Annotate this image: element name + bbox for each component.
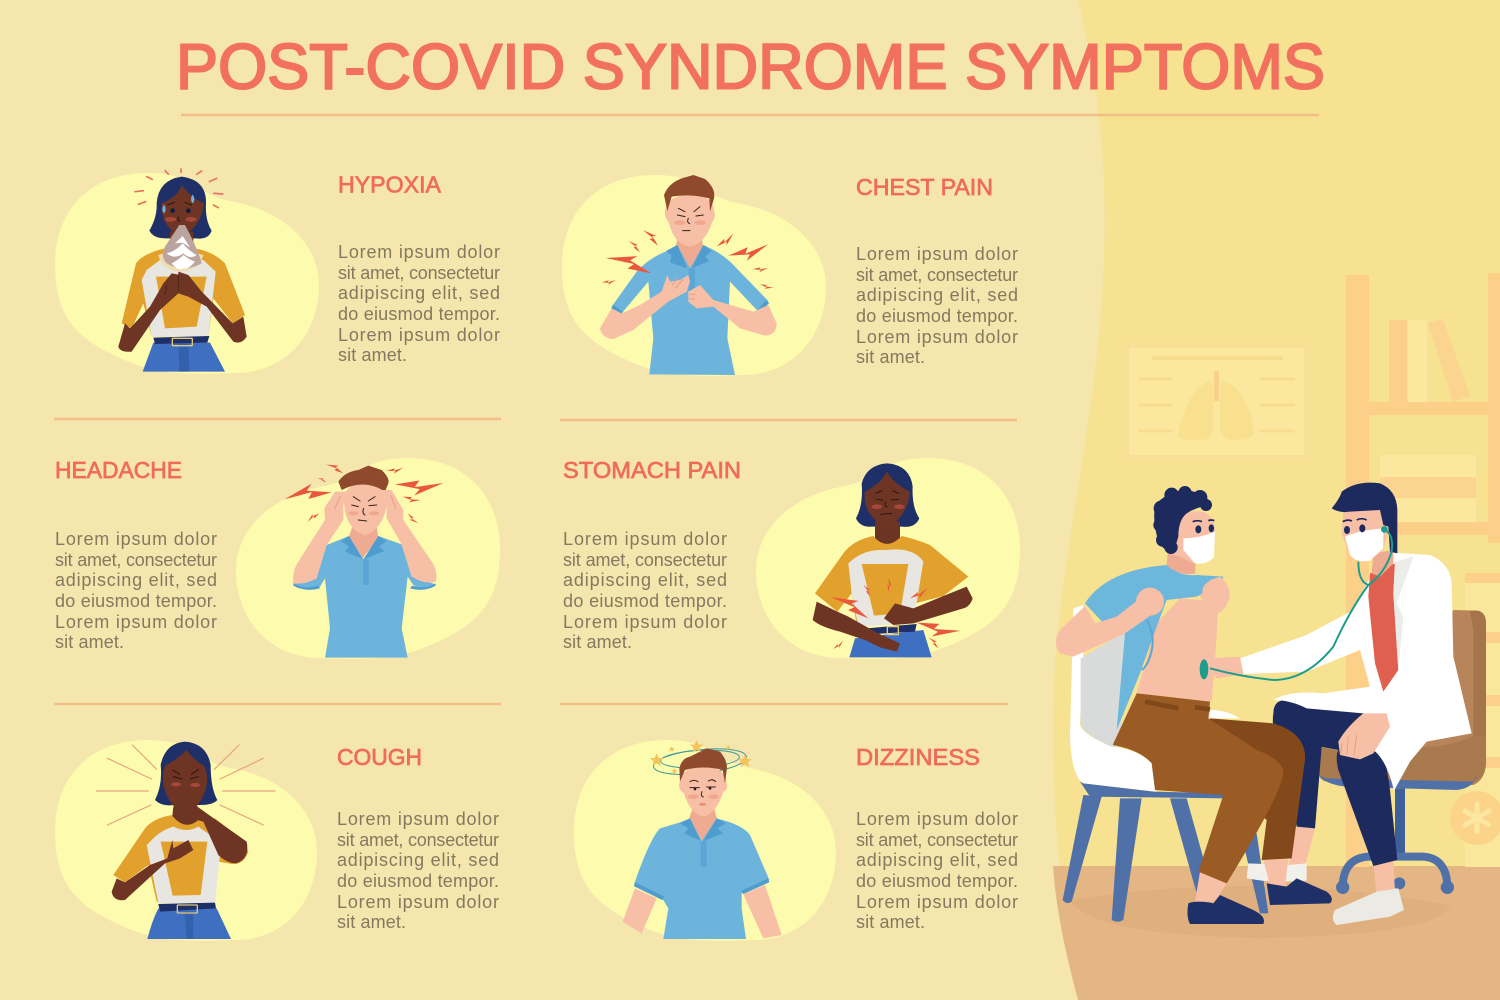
description: do eiusmod tempor. <box>856 871 1018 891</box>
description: Lorem ipsum dolor <box>338 325 500 345</box>
figure: man with headache <box>285 459 443 658</box>
wall <box>1053 0 1500 1000</box>
description: Lorem ipsum dolor <box>337 892 499 912</box>
description: sit amet. <box>338 345 407 365</box>
description: sit amet, consectetur <box>55 550 217 570</box>
divider lines <box>54 419 1017 704</box>
description: adipiscing elit, sed <box>337 850 499 870</box>
cabinet <box>1450 573 1500 867</box>
description: adipiscing elit, sed <box>338 283 500 303</box>
heading: COUGH <box>337 744 422 770</box>
lungs <box>1178 371 1254 440</box>
description: Lorem ipsum dolor <box>337 809 499 829</box>
description: do eiusmod tempor. <box>563 591 727 611</box>
floor shadow <box>1070 886 1450 938</box>
panel: cough <box>55 740 499 941</box>
description: sit amet, consectetur <box>856 830 1018 850</box>
description: sit amet. <box>337 912 406 932</box>
patient chair <box>1063 605 1268 922</box>
description <box>856 809 1018 932</box>
description: Lorem ipsum dolor <box>856 244 1018 264</box>
description: sit amet, consectetur <box>338 263 500 283</box>
patient <box>1056 486 1332 924</box>
description: do eiusmod tempor. <box>338 304 500 324</box>
heading: DIZZINESS <box>856 744 980 770</box>
description: sit amet, consectetur <box>563 550 727 570</box>
panel: hypoxia <box>55 169 500 374</box>
description: Lorem ipsum dolor <box>338 242 500 262</box>
floor <box>1053 866 1500 1000</box>
description: adipiscing elit, sed <box>55 570 217 590</box>
title: POST-COVID SYNDROME SYMPTOMS <box>176 30 1325 102</box>
description: Lorem ipsum dolor <box>856 327 1018 347</box>
blob <box>756 458 1020 659</box>
description: Lorem ipsum dolor <box>563 612 727 632</box>
description: Lorem ipsum dolor <box>55 529 217 549</box>
heading: STOMACH PAIN <box>563 457 741 483</box>
description <box>337 809 499 932</box>
description: Lorem ipsum dolor <box>563 529 727 549</box>
description: Lorem ipsum dolor <box>856 809 1018 829</box>
figure: man holding chest <box>600 175 777 375</box>
description: sit amet, consectetur <box>856 265 1018 285</box>
description: adipiscing elit, sed <box>856 850 1018 870</box>
bookshelf <box>1346 273 1500 867</box>
heading: CHEST PAIN <box>856 174 993 200</box>
description <box>55 529 217 652</box>
description: Lorem ipsum dolor <box>856 892 1018 912</box>
description: adipiscing elit, sed <box>856 285 1018 305</box>
figure: woman holding stomach <box>813 463 973 657</box>
blob <box>236 458 500 659</box>
description: do eiusmod tempor. <box>55 591 217 611</box>
stethoscope <box>1200 526 1392 680</box>
panel: chest pain <box>562 174 1018 376</box>
blob <box>562 175 826 376</box>
blob <box>574 740 836 941</box>
description: do eiusmod tempor. <box>337 871 499 891</box>
blob <box>55 740 317 941</box>
doctor <box>1210 483 1472 925</box>
panel: dizziness <box>574 740 1018 941</box>
description: sit amet, consectetur <box>337 830 499 850</box>
description: Lorem ipsum dolor <box>55 612 217 632</box>
description: sit amet. <box>856 347 925 367</box>
heading: HEADACHE <box>55 457 182 483</box>
title rule <box>181 114 1319 116</box>
description: do eiusmod tempor. <box>856 306 1018 326</box>
description <box>338 242 500 365</box>
figure: dizzy man <box>623 740 782 939</box>
clinic room background <box>1053 0 1500 1000</box>
figure: woman coughing <box>97 742 275 939</box>
illustration: doctor examining patient <box>1056 483 1486 925</box>
blob <box>55 173 319 374</box>
panel: stomach pain <box>563 457 1020 659</box>
heading: HYPOXIA <box>338 172 442 198</box>
description: sit amet. <box>563 632 632 652</box>
lungs poster <box>1124 343 1310 460</box>
description <box>856 244 1018 367</box>
description: sit amet. <box>55 632 124 652</box>
description: sit amet. <box>856 912 925 932</box>
description <box>563 529 727 652</box>
doctor chair <box>1318 610 1486 894</box>
panel: headache <box>55 457 500 659</box>
figure: woman gasping <box>118 169 247 372</box>
description: adipiscing elit, sed <box>563 570 727 590</box>
dizzy stars <box>650 740 752 774</box>
